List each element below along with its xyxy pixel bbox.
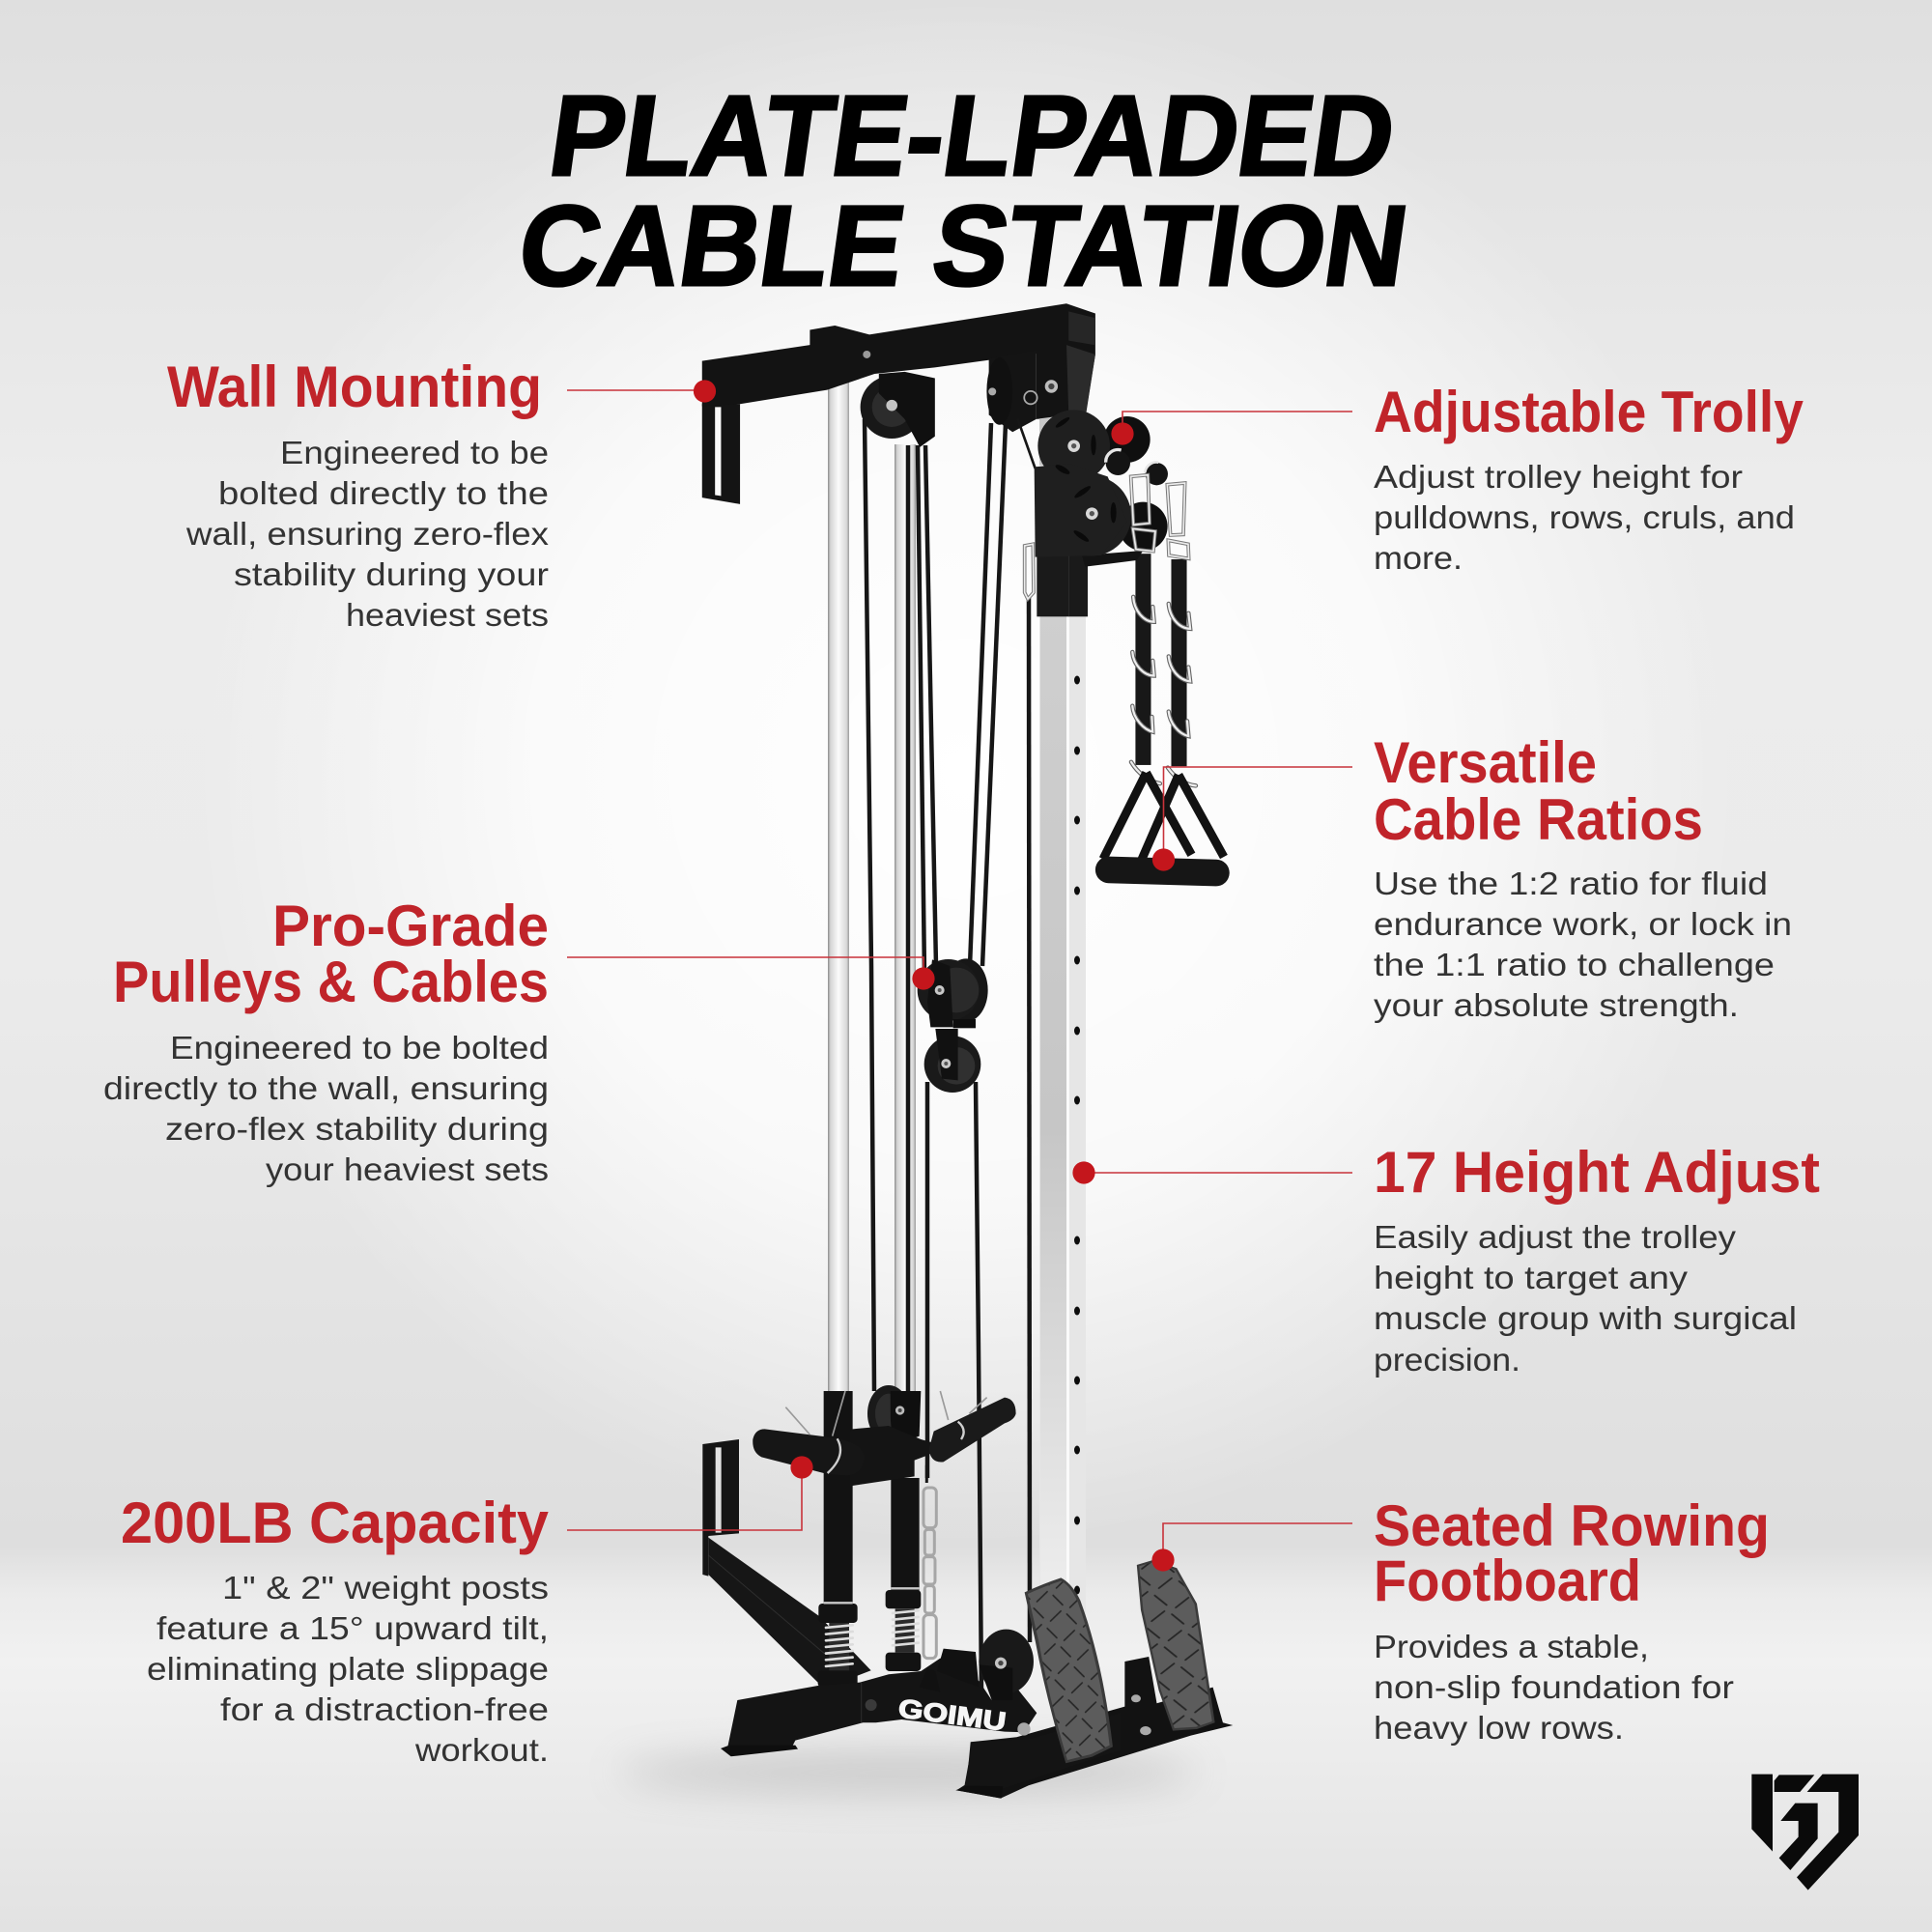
description: wall, ensuring zero-flex xyxy=(185,516,550,552)
GOIMU brand text: GOIMU xyxy=(896,1693,1008,1737)
heading: Wall Mounting xyxy=(167,355,542,419)
description xyxy=(1374,866,1792,1023)
description: stability during your xyxy=(234,556,549,592)
posts and collars xyxy=(818,1391,921,1688)
description: the 1:1 ratio to challenge xyxy=(1374,947,1775,982)
description xyxy=(185,435,550,633)
heading: Adjustable Trolly xyxy=(1374,380,1804,444)
springs xyxy=(826,1608,919,1670)
marker dot xyxy=(790,1456,813,1479)
leader line xyxy=(1122,412,1352,434)
description xyxy=(1374,1629,1734,1746)
description: your absolute strength. xyxy=(1374,987,1739,1023)
upper pulleys xyxy=(861,350,1058,447)
rear pulley xyxy=(867,1385,921,1446)
description: heavy low rows. xyxy=(1374,1710,1624,1746)
floor shadow xyxy=(618,1751,1198,1794)
title: CABLE STATION xyxy=(511,184,1415,310)
leader line xyxy=(1163,1523,1352,1555)
base assembly xyxy=(702,1385,1121,1799)
marker dot xyxy=(1111,422,1134,445)
title: PLATE-LPADED xyxy=(542,73,1403,200)
weight posts xyxy=(753,1391,1016,1486)
leader line xyxy=(1084,1172,1352,1174)
description: Engineered to be xyxy=(280,435,549,470)
description: zero-flex stability during xyxy=(165,1111,549,1147)
icon: brand shield logo xyxy=(1751,1775,1859,1890)
leader line xyxy=(567,389,704,391)
right foot and rear footplate xyxy=(956,1560,1233,1799)
marker dot xyxy=(912,967,935,990)
callout: adjustable trolly xyxy=(1111,380,1804,576)
front pulley xyxy=(979,1630,1034,1700)
leader line xyxy=(567,1467,802,1530)
description xyxy=(103,1030,549,1187)
heading: 17 Height Adjust xyxy=(1374,1140,1820,1205)
bolts xyxy=(866,1699,1031,1736)
leader line xyxy=(567,957,923,979)
front footplate xyxy=(1025,1577,1113,1763)
description xyxy=(1374,459,1795,576)
silver upright column xyxy=(1039,609,1086,1647)
silver guide rods xyxy=(828,367,916,1406)
description: workout. xyxy=(414,1732,549,1768)
trolley xyxy=(1017,410,1189,616)
top assembly xyxy=(702,303,1224,873)
description xyxy=(147,1570,549,1768)
description: muscle group with surgical xyxy=(1374,1300,1797,1336)
heading: Footboard xyxy=(1374,1548,1641,1613)
description: heaviest sets xyxy=(346,597,549,633)
callout: 17 height adjust xyxy=(1072,1140,1820,1378)
description: Easily adjust the trolley xyxy=(1374,1219,1737,1255)
description: pulldowns, rows, cruls, and xyxy=(1374,499,1795,535)
description: precision. xyxy=(1374,1342,1520,1378)
description: 1" & 2" weight posts xyxy=(222,1570,549,1605)
marker dot xyxy=(1072,1161,1095,1184)
wall bracket xyxy=(702,404,740,504)
callout: 200lb capacity xyxy=(121,1456,813,1768)
heading xyxy=(1374,730,1703,852)
rope straps xyxy=(1131,554,1196,785)
heading: Pulleys & Cables xyxy=(113,950,549,1014)
mid pulley block xyxy=(918,958,988,1093)
title xyxy=(511,73,1415,310)
description xyxy=(1374,1219,1797,1378)
heading xyxy=(113,894,549,1014)
description: Engineered to be bolted xyxy=(170,1030,549,1065)
chain xyxy=(923,1465,936,1659)
collar rings xyxy=(824,1588,920,1603)
description: height to target any xyxy=(1374,1260,1689,1295)
marker dot xyxy=(694,380,716,403)
heading xyxy=(1374,1493,1770,1613)
description: more. xyxy=(1374,540,1463,576)
description: Adjust trolley height for xyxy=(1374,459,1743,495)
handle xyxy=(1103,773,1224,873)
description: Use the 1:2 ratio for fluid xyxy=(1374,866,1768,901)
product: cable station machine xyxy=(618,303,1233,1799)
top beam xyxy=(702,303,1095,419)
description: directly to the wall, ensuring xyxy=(103,1070,549,1106)
heading: 200LB Capacity xyxy=(121,1491,550,1555)
marker dot xyxy=(1152,848,1175,871)
description: non-slip foundation for xyxy=(1374,1669,1734,1705)
heading: Cable Ratios xyxy=(1374,787,1703,852)
heading: Seated Rowing xyxy=(1374,1493,1770,1558)
description: endurance work, or lock in xyxy=(1374,906,1792,942)
leader line xyxy=(1163,767,1352,860)
lower wall bracket and brace xyxy=(702,1439,871,1683)
callout: versatile cable ratios xyxy=(1152,730,1792,1023)
callout: pro-grade pulleys xyxy=(103,894,935,1187)
description: bolted directly to the xyxy=(218,475,549,511)
description: feature a 15° upward tilt, xyxy=(156,1610,549,1646)
description: your heaviest sets xyxy=(266,1151,549,1187)
marker dot xyxy=(1151,1548,1175,1572)
description: Provides a stable, xyxy=(1374,1629,1649,1664)
floor base frame xyxy=(721,1649,1121,1799)
heading: Versatile xyxy=(1374,730,1597,795)
heading: Pro-Grade xyxy=(272,894,549,958)
description: eliminating plate slippage xyxy=(147,1651,549,1687)
description: for a distraction-free xyxy=(220,1691,549,1727)
callout: wall mounting xyxy=(167,355,716,633)
callout: seated rowing footboard xyxy=(1151,1493,1770,1746)
cables xyxy=(865,419,1030,1692)
